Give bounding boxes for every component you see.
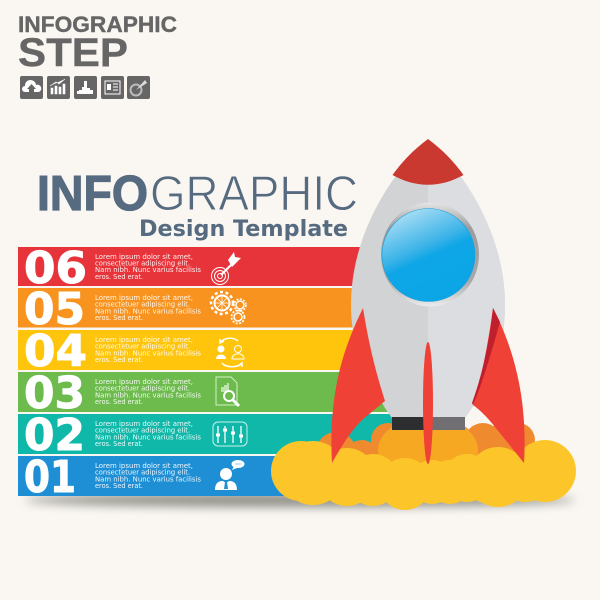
exhaust clouds front layer bbox=[271, 440, 576, 510]
step bar 02: eros. Sed erat. bbox=[95, 439, 143, 448]
step bar 03: eros. Sed erat. bbox=[95, 397, 143, 406]
rocket body bbox=[351, 139, 505, 418]
step bar 06 bbox=[18, 243, 398, 294]
icon: growth chart bbox=[47, 76, 70, 99]
header icon row bbox=[20, 76, 150, 99]
icon: document search bbox=[216, 377, 239, 406]
icon: target and arrow bbox=[127, 76, 150, 99]
header title: infographic step: STEP bbox=[18, 31, 128, 75]
step bar 03 bbox=[18, 368, 398, 419]
step bar 03: Lorem ipsum dolor sit amet, bbox=[95, 377, 193, 386]
step bar 01: eros. Sed erat. bbox=[95, 481, 143, 490]
rocket bbox=[331, 139, 525, 464]
icon: bar graph bbox=[74, 76, 97, 99]
main heading: GRAPHIC bbox=[150, 167, 358, 221]
main heading: INFO bbox=[37, 167, 148, 221]
step bar 02: 02 bbox=[24, 410, 85, 461]
step bar 04: 04 bbox=[24, 326, 87, 377]
step bar 03: consectetuer adipiscing elit. bbox=[95, 384, 190, 393]
step bar 02: Lorem ipsum dolor sit amet, bbox=[95, 419, 193, 428]
step bar 01: Nam nibh. Nunc varius facilisis bbox=[95, 474, 201, 483]
step bar 05: Nam nibh. Nunc varius facilisis bbox=[95, 306, 201, 315]
right fin bbox=[473, 308, 525, 463]
header title: infographic step: INFOGRAPHIC bbox=[18, 12, 177, 37]
centre fin bbox=[423, 342, 433, 464]
step bar 05: eros. Sed erat. bbox=[95, 313, 143, 322]
icon: cloud upload bbox=[20, 76, 43, 99]
main heading bbox=[37, 167, 358, 221]
step bar 01 bbox=[18, 452, 318, 503]
icon: id card bbox=[101, 76, 124, 99]
step bar 05 bbox=[18, 284, 398, 335]
step bar 06: Lorem ipsum dolor sit amet, bbox=[95, 252, 193, 261]
step bar 04 bbox=[18, 326, 398, 377]
right fin dark stripe bbox=[472, 308, 500, 405]
step bar 06: 06 bbox=[24, 243, 87, 294]
step bar 01: Lorem ipsum dolor sit amet, bbox=[95, 461, 193, 470]
step bar 06: eros. Sed erat. bbox=[95, 272, 143, 281]
icon: people exchange bbox=[216, 338, 244, 367]
drop shadow under bars bbox=[25, 493, 575, 507]
step bar 06: consectetuer adipiscing elit. bbox=[95, 258, 190, 268]
step bar 04: Lorem ipsum dolor sit amet, bbox=[95, 335, 193, 344]
rocket nose cone bbox=[392, 139, 464, 185]
subtitle: Design Template bbox=[139, 217, 348, 242]
rocket nozzle bbox=[392, 417, 465, 430]
step bar 03: 03 bbox=[24, 368, 85, 419]
rocket window bbox=[381, 202, 479, 306]
step bar 05: 05 bbox=[24, 284, 85, 335]
left fin bbox=[331, 308, 385, 463]
step bar 02: Nam nibh. Nunc varius facilisis bbox=[95, 432, 201, 441]
exhaust smoke back layer bbox=[316, 417, 535, 483]
header title: infographic step bbox=[18, 12, 177, 75]
step bar 02 bbox=[18, 410, 398, 461]
step bar 01: consectetuer adipiscing elit. bbox=[95, 468, 190, 477]
step bar 06: Nam nibh. Nunc varius facilisis bbox=[95, 265, 201, 274]
step bar 05: Lorem ipsum dolor sit amet, bbox=[95, 293, 193, 302]
step bar 04: consectetuer adipiscing elit. bbox=[95, 342, 190, 351]
icon: sliders bbox=[213, 422, 247, 446]
step bar 04: eros. Sed erat. bbox=[95, 355, 143, 364]
step bar 05: consectetuer adipiscing elit. bbox=[95, 300, 190, 309]
icon: gears bbox=[211, 292, 246, 324]
step bar 03: Nam nibh. Nunc varius facilisis bbox=[95, 390, 201, 399]
step bar 04: Nam nibh. Nunc varius facilisis bbox=[95, 348, 201, 357]
icon: businessman with speech bubble bbox=[215, 460, 244, 490]
step bar 02: consectetuer adipiscing elit. bbox=[95, 426, 190, 435]
step bar 01: 01 bbox=[24, 452, 76, 503]
icon: target with arrow bbox=[212, 252, 241, 284]
